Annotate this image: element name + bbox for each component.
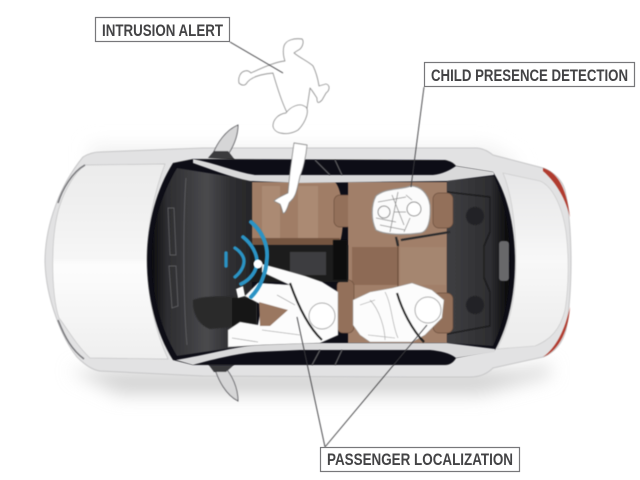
intruder arm through window [274,143,307,213]
trunk area [447,176,510,346]
mirror: bottom [208,364,238,401]
mirror: top [208,125,238,160]
intruder body and arms [239,39,329,125]
roof rail: top [193,159,494,183]
radar waves sensor [226,222,267,297]
seat: front top [252,182,353,246]
label: passenger localization [320,448,520,472]
driver figure [228,264,338,347]
rear deck [497,173,568,349]
car: top view [45,125,571,401]
steering wheel block [193,296,257,329]
label: passenger localization: PASSENGER LOCALIZATION [327,450,513,469]
rear passenger figure [353,283,444,342]
callout lines [230,42,427,447]
wave: outer [251,222,267,297]
rear bench seat [337,182,453,343]
intruder figure leaning into the car [239,39,329,213]
car shadow [70,146,550,394]
tail light: upper [543,168,570,217]
wave: third [235,248,244,277]
headlight edges [58,165,85,359]
leader: passenger localization front [297,317,325,447]
intruder hip [273,105,307,133]
dashboard [152,168,252,356]
trunk details [447,192,509,334]
dashboard vents [168,178,187,345]
leader: intrusion alert [230,42,283,73]
label: intrusion alert: INTRUSION ALERT [102,21,223,40]
child in car seat [372,186,450,246]
wave: inner [224,253,228,266]
center console [250,240,348,282]
cabin glass and interior base [147,159,515,365]
car body [45,148,571,377]
leader: child presence detection [411,87,424,187]
sensor glow dot [254,260,262,268]
leader: passenger localization rear [325,325,427,447]
side strip: dark pillar detail [312,160,342,365]
label: intrusion alert [96,18,230,42]
wave: second [241,237,257,284]
tail light: lower [543,307,570,357]
hood [53,164,168,359]
roof rail: bottom [176,343,495,365]
